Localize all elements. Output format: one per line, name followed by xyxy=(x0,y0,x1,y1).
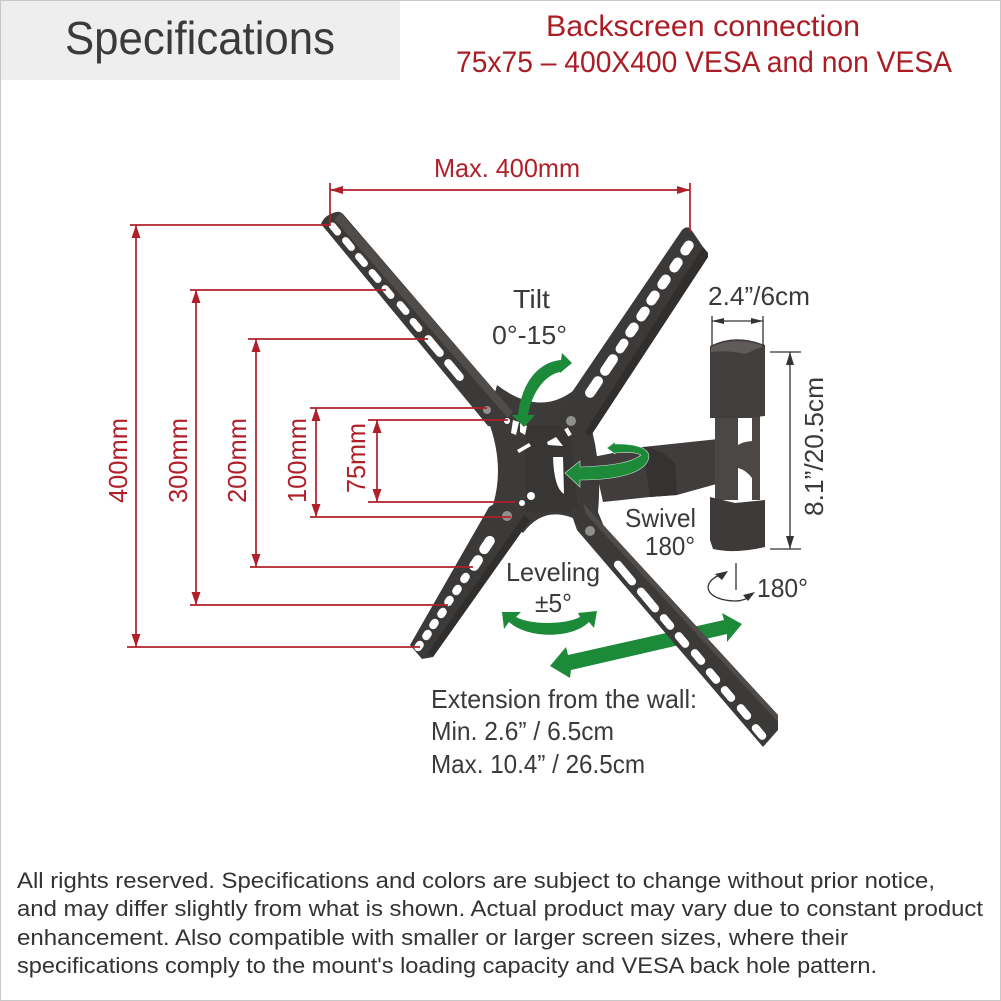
label: 300mm: 300mm xyxy=(163,418,193,503)
footer disclaimer xyxy=(17,868,984,978)
backscreen connection heading: Backscreen connection xyxy=(546,10,860,43)
icon: rotation 180: 180° xyxy=(757,573,808,603)
arm: bottom right xyxy=(570,503,778,747)
footer disclaimer: All rights reserved. Specifications and colors are subject to change without prior notice, xyxy=(17,868,935,893)
label: 100mm: 100mm xyxy=(282,418,312,503)
heading: Specifications: Specifications xyxy=(65,12,335,64)
icon: rotation 180 xyxy=(708,563,808,603)
text: extension from the wall: Min. 2.6” / 6.5cm xyxy=(431,716,614,746)
slots xyxy=(327,221,465,383)
label: Swivel: Swivel xyxy=(625,503,696,533)
arrow: extension from the wall xyxy=(550,613,742,678)
footer disclaimer: specifications comply to the mount's loading capacity and VESA back hole pattern. xyxy=(17,953,877,978)
header panel xyxy=(1,1,400,80)
dimension: depth 2.4"/6cm: 2.4”/6cm xyxy=(708,281,810,311)
footer disclaimer: enhancement. Also compatible with smaller or larger screen sizes, where their xyxy=(17,925,849,950)
arrow: tilt xyxy=(512,353,572,427)
label: 200mm: 200mm xyxy=(222,418,252,503)
label: Tilt: Tilt xyxy=(513,284,551,314)
wall mount: swivel arm and column xyxy=(593,339,765,551)
label: Max. 400mm: Max. 400mm xyxy=(434,153,580,183)
dimension: height 8.1"/20.5cm: 8.1”/20.5cm xyxy=(799,377,829,516)
label: 75mm: 75mm xyxy=(341,423,371,493)
dimension: height 8.1"/20.5cm xyxy=(770,352,829,549)
label: Swivel 180: 180° xyxy=(645,531,695,561)
arm: top left xyxy=(321,212,513,428)
text: extension from the wall: Max. 10.4” / 26.5cm xyxy=(431,749,645,779)
footer disclaimer: and may differ slightly from what is shown. Actual product may vary due to constant product xyxy=(17,896,984,921)
text: extension from the wall xyxy=(431,684,697,779)
arm: top right xyxy=(553,227,708,444)
arrow: swivel xyxy=(565,442,649,487)
backscreen connection heading xyxy=(456,10,952,79)
label: 0-15 degrees: 0°-15° xyxy=(492,320,567,350)
backscreen connection heading: 75x75 – 400X400 VESA and non VESA xyxy=(456,46,952,79)
mount plate: centre bracket xyxy=(488,385,612,546)
dimension lines: red xyxy=(127,183,690,647)
label: Leveling: Leveling xyxy=(506,557,600,587)
dimension: depth 2.4"/6cm xyxy=(708,281,810,346)
label: plus minus 5: ±5° xyxy=(535,588,572,618)
text: extension from the wall: Extension from the wall: xyxy=(431,684,697,714)
arrow: leveling xyxy=(502,611,597,635)
dimension arrowheads: red xyxy=(132,186,690,647)
arm: bottom left xyxy=(410,497,530,659)
label: 400mm: 400mm xyxy=(103,418,133,503)
